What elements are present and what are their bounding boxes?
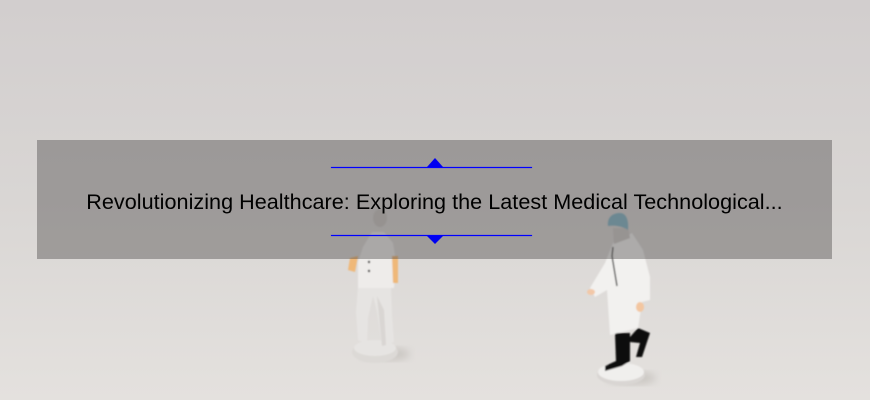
figurine: patient xyxy=(348,209,410,363)
bottom divider with down-pointing triangle xyxy=(330,234,532,244)
banner panel xyxy=(37,140,832,259)
title: Revolutionizing Healthcare: Exploring the Latest Medical Technological... xyxy=(86,189,783,214)
figurine: doctor xyxy=(587,213,656,385)
top divider with up-pointing triangle xyxy=(330,158,532,168)
